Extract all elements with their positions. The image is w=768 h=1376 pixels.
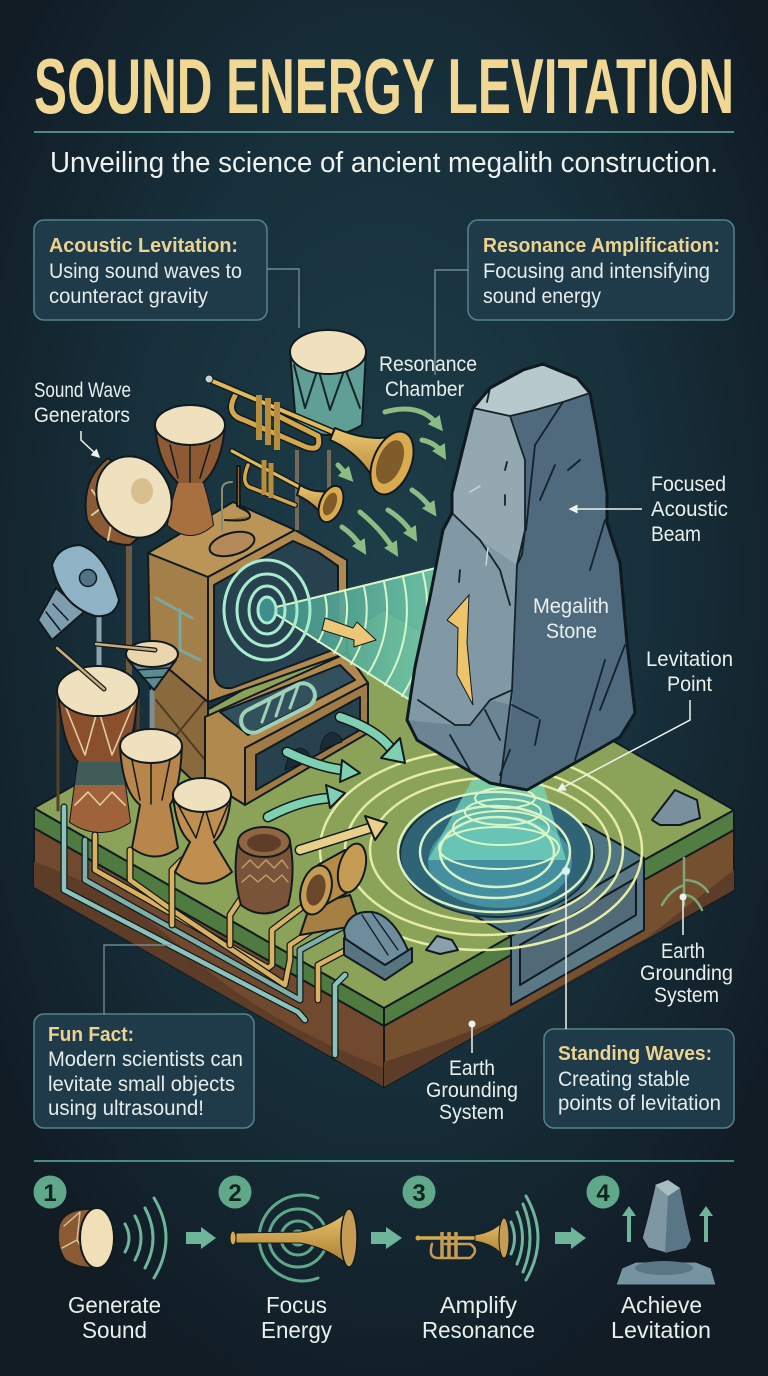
step label — [422, 1292, 535, 1343]
step 3: amplify resonance — [402, 1176, 538, 1343]
slab left side — [34, 808, 384, 1087]
label: focused acoustic beam — [570, 473, 728, 546]
label: resonance chamber: Resonance — [379, 353, 477, 376]
mid drums, barrel and resonator — [120, 729, 412, 980]
poles — [297, 450, 329, 530]
panel: acoustic levitation — [34, 220, 267, 320]
pit floor — [415, 800, 644, 936]
panel: acoustic levitation: Using sound waves to — [49, 260, 242, 283]
step label: Achieve — [621, 1292, 702, 1318]
number badge: 3 — [412, 1180, 426, 1207]
trumpet large — [232, 394, 319, 448]
disc on top — [207, 527, 257, 561]
sonic rings — [224, 560, 310, 660]
number badge: 1 — [43, 1180, 57, 1207]
panel: standing waves: Standing Waves: — [558, 1043, 712, 1065]
label: sound wave generators: Generators — [34, 404, 130, 427]
stone icon — [642, 1180, 691, 1253]
label: earth grounding center: System — [439, 1101, 504, 1124]
outline — [407, 364, 635, 790]
cone drum — [96, 641, 178, 735]
top facet — [473, 364, 590, 416]
step label: Focus — [266, 1292, 327, 1318]
pedestal — [616, 1261, 716, 1285]
left upper face — [452, 408, 525, 565]
drum icon — [58, 1208, 114, 1268]
step label: Energy — [261, 1317, 332, 1343]
step label — [611, 1292, 711, 1343]
step label: Levitation — [611, 1317, 711, 1343]
panel: standing waves — [544, 1029, 734, 1128]
label: earth grounding center: Earth — [449, 1057, 495, 1080]
label: megalith stone: Stone — [546, 620, 597, 643]
barrel — [236, 842, 293, 914]
pipes — [64, 807, 350, 1055]
number badge: 2 — [228, 1180, 242, 1207]
antenna base — [225, 466, 250, 520]
gray motor — [344, 912, 412, 976]
step label: Sound — [82, 1317, 147, 1343]
label: earth grounding right: System — [654, 984, 719, 1007]
subtitle: Unveiling the science of ancient megalith construction. — [50, 147, 718, 179]
panel: resonance amplification — [468, 220, 734, 320]
small rocks — [652, 790, 700, 825]
arrow — [555, 1227, 586, 1249]
panel: standing waves: points of levitation — [558, 1092, 721, 1115]
label: earth grounding right: Earth — [661, 940, 705, 963]
trumpets and teal drum — [205, 330, 422, 530]
pool — [400, 793, 594, 917]
trumpet small — [245, 465, 295, 505]
root system — [662, 858, 708, 910]
horn resonator — [300, 895, 360, 935]
label: earth grounding right: Grounding — [640, 962, 733, 985]
label: megalith stone — [533, 595, 609, 643]
coil — [237, 679, 319, 737]
label: earth grounding center — [426, 1020, 518, 1124]
panel: resonance amplification: Focusing and intensifying — [483, 260, 710, 283]
arrow — [186, 1227, 216, 1249]
rings — [259, 1195, 327, 1281]
ground arrows — [268, 717, 405, 850]
panel: standing waves: Creating stable — [558, 1068, 690, 1091]
step 1: generate sound — [34, 1176, 166, 1343]
panel: fun fact: using ultrasound! — [48, 1097, 204, 1120]
trumpet — [416, 1218, 509, 1258]
rune — [447, 595, 473, 705]
lower box — [205, 653, 368, 805]
label: resonance chamber: Chamber — [385, 378, 464, 401]
cabinet lower left face — [150, 653, 208, 795]
drum 2 — [120, 746, 182, 856]
yellow beam arrow — [322, 618, 376, 647]
step label: Amplify — [440, 1292, 518, 1318]
panel: fun fact: Modern scientists can — [48, 1048, 243, 1071]
panel: fun fact: levitate small objects — [48, 1073, 235, 1096]
number badge — [586, 1176, 620, 1208]
concentric rings — [320, 750, 642, 950]
base fill — [407, 364, 635, 790]
label: focused acoustic beam: Focused — [651, 473, 726, 496]
label: levitation point: Point — [667, 673, 712, 696]
step 2: focus energy — [218, 1176, 357, 1343]
label: focused acoustic beam: Beam — [651, 523, 701, 546]
label: focused acoustic beam: Acoustic — [651, 498, 728, 521]
label: resonance chamber — [379, 353, 477, 401]
number badge — [34, 1176, 66, 1208]
number badge — [218, 1176, 252, 1208]
label: sound wave generators: Sound Wave — [34, 379, 131, 402]
megalith stone — [407, 364, 635, 790]
ground slab — [34, 610, 734, 1087]
slab top — [34, 610, 734, 1008]
standing waves pointer — [562, 867, 570, 1029]
acoustic beam — [268, 568, 436, 700]
teal drum — [290, 352, 366, 435]
step label — [68, 1292, 161, 1343]
step label — [261, 1292, 332, 1343]
pit side cut — [511, 858, 644, 1005]
standing wave rings — [439, 788, 559, 869]
tilted drum — [82, 443, 186, 680]
djembe top — [155, 405, 225, 535]
panel: acoustic levitation: counteract gravity — [49, 285, 208, 308]
upper left face — [148, 553, 208, 702]
panel: fun fact: Fun Fact: — [48, 1024, 134, 1046]
number badge: 4 — [596, 1180, 610, 1207]
wave arcs — [125, 1198, 166, 1278]
step label: Resonance — [422, 1317, 535, 1343]
label: levitation point — [558, 648, 733, 790]
number badge — [402, 1176, 436, 1208]
drum 3 — [173, 795, 232, 884]
panel: fun fact — [34, 1014, 254, 1128]
label: levitation point: Levitation — [646, 648, 733, 671]
step 4: achieve levitation — [586, 1176, 716, 1343]
screen frame — [208, 530, 347, 702]
machine cabinet — [148, 466, 368, 805]
top face — [148, 502, 295, 577]
arrow — [371, 1227, 402, 1249]
panel: resonance amplification: sound energy — [483, 285, 601, 308]
right face — [500, 393, 635, 790]
step label: Generate — [68, 1292, 161, 1318]
large djembe — [57, 648, 139, 832]
slab right side — [384, 810, 734, 1087]
label: sound wave generators — [34, 379, 131, 457]
speaker horn — [38, 545, 119, 668]
horn — [230, 1209, 357, 1267]
panel: acoustic levitation: Acoustic Levitation: — [49, 235, 238, 257]
label: earth grounding center: Grounding — [426, 1079, 518, 1102]
bottom left face — [407, 700, 512, 785]
cracks — [418, 388, 625, 785]
up arrows — [622, 1206, 713, 1242]
label: earth grounding right — [640, 894, 733, 1007]
wave arcs — [511, 1196, 538, 1280]
green sound arrows — [338, 409, 442, 550]
label: megalith stone: Megalith — [533, 595, 609, 618]
standing wave cone — [428, 780, 566, 860]
panel: resonance amplification: Resonance Amplification: — [483, 235, 720, 257]
